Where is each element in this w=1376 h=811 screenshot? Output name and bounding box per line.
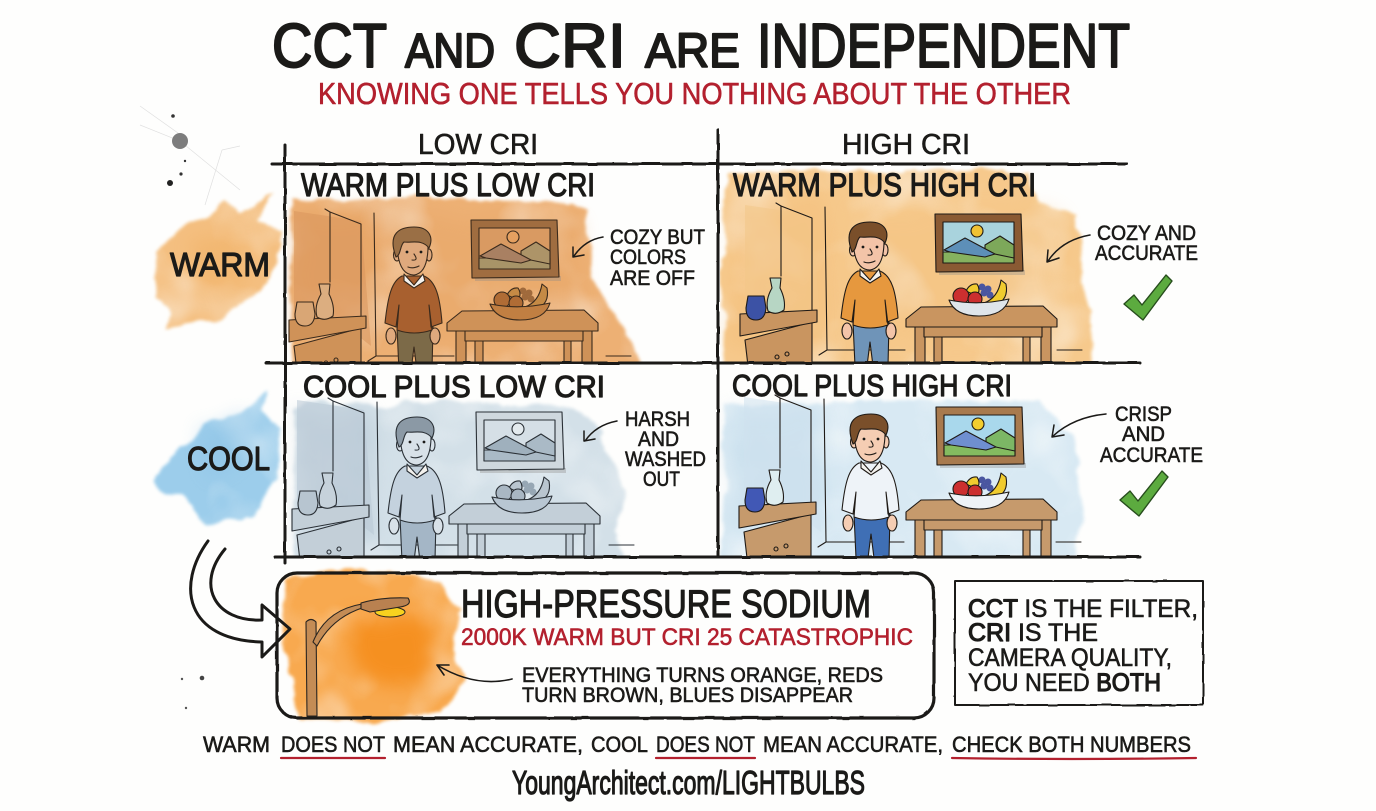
- title: CCT: [272, 12, 387, 81]
- panel: warm plus high CRI: WARM PLUS HIGH CRI: [733, 167, 1036, 203]
- panel: warm plus low CRI: COLORS: [610, 246, 686, 269]
- callout: filter and camera analogy: [955, 581, 1203, 705]
- panel: cool plus low CRI: WASHED: [625, 448, 706, 471]
- panel: high-pressure sodium: [277, 568, 934, 722]
- panel: cool plus high CRI: ACCURATE: [1100, 444, 1203, 467]
- person: cool high: [842, 414, 899, 558]
- rounded box outline: [277, 573, 934, 718]
- painting: warm high: [935, 214, 1025, 275]
- bottom takeaway line: CHECK BOTH NUMBERS: [952, 732, 1191, 757]
- icon: street lamp: [306, 598, 409, 716]
- row label: cool: COOL: [187, 440, 270, 477]
- panel: warm plus low CRI: ARE OFF: [610, 267, 695, 290]
- room: warm high: [740, 203, 1082, 366]
- title: ARE: [645, 25, 740, 78]
- painting: warm low: [471, 220, 561, 281]
- panel: cool plus high CRI: [722, 368, 1203, 560]
- row label: warm: WARM: [170, 246, 270, 283]
- arrow to lamp glow: [437, 665, 512, 682]
- callout: filter and camera analogy: CCT IS THE FILTER,: [968, 595, 1198, 623]
- matrix grid lines: [266, 130, 1140, 563]
- room: cool high: [739, 395, 1081, 558]
- callout: filter and camera analogy: CRI IS THE: [968, 619, 1098, 647]
- bottom takeaway line: MEAN ACCURATE,: [393, 732, 583, 757]
- room: warm low: [289, 209, 631, 372]
- bottom takeaway line: COOL: [591, 732, 648, 757]
- red sub-heading: 2000K WARM BUT CRI 25 CATASTROPHIC: [461, 624, 913, 651]
- title: INDEPENDENT: [757, 12, 1130, 81]
- panel: cool plus low CRI: COOL PLUS LOW CRI: [303, 369, 605, 404]
- panel: cool plus high CRI: AND: [1122, 423, 1165, 446]
- subtitle: KNOWING ONE TELLS YOU NOTHING ABOUT THE OTHER: [318, 76, 1071, 111]
- table and fruit bowl: cool high: [906, 473, 1057, 560]
- bottom takeaway line: DOES NOT: [281, 732, 385, 757]
- panel: cool plus low CRI: OUT: [643, 468, 680, 491]
- row label: warm: [152, 192, 280, 328]
- panel: cool plus low CRI: AND: [638, 428, 679, 451]
- table and fruit bowl: warm low: [447, 284, 598, 371]
- title: CRI: [514, 12, 626, 81]
- callout: filter and camera analogy: CAMERA QUALITY,: [968, 644, 1172, 672]
- table and fruit bowl: warm high: [906, 280, 1057, 367]
- splatter marks: [140, 106, 240, 709]
- bottom takeaway line: DOES NOT: [656, 732, 755, 757]
- panel: warm plus low CRI: COZY BUT: [610, 226, 705, 249]
- panel: warm plus low CRI: [289, 167, 705, 372]
- title: [272, 12, 1130, 81]
- panel: warm plus high CRI: [722, 167, 1198, 370]
- callout: filter and camera analogy: YOU NEED BOTH: [968, 669, 1161, 697]
- description: TURN BROWN, BLUES DISAPPEAR: [522, 684, 853, 707]
- bottom takeaway line: WARM: [203, 732, 270, 757]
- website link: YoungArchitect.com/LIGHTBULBS: [512, 764, 865, 801]
- person: warm low: [385, 227, 442, 371]
- painting: cool high: [936, 407, 1026, 468]
- description: [522, 664, 883, 707]
- table and fruit bowl: cool low: [449, 477, 600, 564]
- panel: warm plus high CRI: ACCURATE: [1095, 242, 1198, 265]
- column heading: low CRI: LOW CRI: [418, 129, 538, 161]
- orange watercolor wash: [283, 568, 468, 722]
- heading: HIGH-PRESSURE SODIUM: [461, 583, 871, 626]
- person: cool low: [388, 417, 445, 561]
- panel: cool plus high CRI: CRISP: [1115, 403, 1172, 426]
- title: AND: [405, 25, 495, 78]
- column heading: high CRI: HIGH CRI: [842, 129, 970, 161]
- painting: cool low: [476, 412, 566, 473]
- person: warm high: [841, 222, 898, 366]
- panel: warm plus high CRI: COZY AND: [1097, 222, 1196, 245]
- bottom takeaway line: MEAN ACCURATE,: [763, 732, 943, 757]
- panel: cool plus high CRI: COOL PLUS HIGH CRI: [732, 368, 1012, 403]
- arrow: from warm row to sodium box: [191, 541, 290, 657]
- description: EVERYTHING TURNS ORANGE, REDS: [522, 664, 883, 687]
- bottom takeaway line: [203, 732, 1196, 759]
- panel: cool plus low CRI: [292, 369, 706, 564]
- panel: warm plus low CRI: WARM PLUS LOW CRI: [301, 167, 595, 203]
- row label: cool: [155, 390, 280, 525]
- room: cool low: [292, 398, 634, 561]
- panel: cool plus low CRI: HARSH: [625, 408, 690, 431]
